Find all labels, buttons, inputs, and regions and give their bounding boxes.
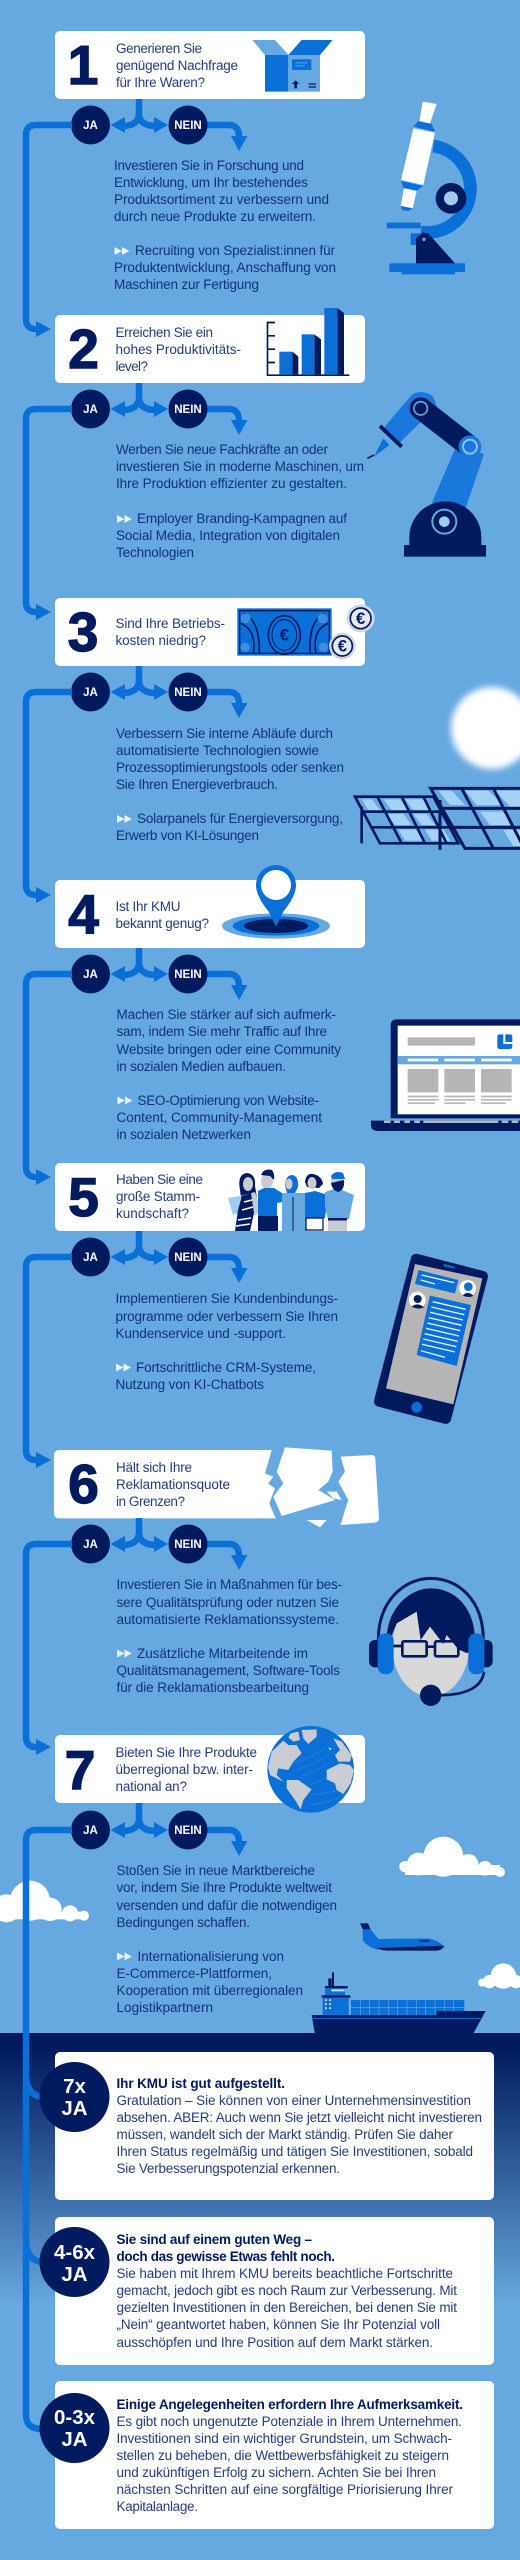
tip text: Social Media, Integration von digitalen — [116, 528, 340, 543]
result text: Ihren Status regelmäßig und tätigen Sie Investitionen, sobald — [116, 2144, 473, 2159]
decision branch: JA — [83, 1539, 98, 1551]
arrow: ja to step 6 — [26, 1257, 72, 1468]
arrow: ja to step 5 — [26, 974, 72, 1185]
recommendation text: programme oder verbessern Sie Ihren — [116, 1309, 338, 1324]
decision branch — [71, 1518, 248, 1570]
recommendation text: sam, indem Sie mehr Traffic auf Ihre — [116, 1024, 327, 1039]
result text: und zukünftigen Erfolg zu sichern. Achten Sie bei Ihren — [116, 2465, 436, 2480]
icon: cloud left — [0, 1881, 89, 1922]
result text: Kapitalanlage. — [116, 2499, 198, 2514]
question: große Stamm- — [116, 1189, 200, 1204]
icon: group of customers — [228, 1170, 354, 1231]
icon: container ship — [312, 1972, 486, 2035]
recommendation text: sere Qualitätsprüfung oder nutzen Sie — [116, 1595, 339, 1610]
recommendation text: Entwicklung, um Ihr bestehendes — [114, 175, 308, 190]
result text: nächsten Schritten auf eine sorgfältige Priorisierung Ihrer — [116, 2482, 454, 2497]
recommendation text: investieren Sie in moderne Maschinen, um — [116, 459, 364, 474]
result text — [116, 2076, 482, 2176]
number 2: 2 — [68, 318, 99, 380]
decision branch: JA — [83, 687, 98, 699]
card — [55, 2381, 494, 2529]
tip text: Logistikpartnern — [116, 2000, 213, 2015]
tip text: in sozialen Netzwerken — [116, 1127, 251, 1142]
recommendation text: Ihre Produktion effizienter zu gestalten. — [116, 476, 347, 491]
decision branch: NEIN — [174, 120, 202, 132]
number 6: 6 — [68, 1453, 99, 1515]
decision branch: JA — [83, 969, 98, 981]
recommendation text: Bedingungen schaffen. — [116, 1915, 250, 1930]
icon: smartphone chat — [373, 1253, 489, 1425]
question — [116, 1460, 230, 1509]
icon: airplane — [360, 1923, 444, 1951]
result text: gezielten Investitionen in den Bereichen, bei denen Sie mit — [116, 2300, 457, 2315]
result text — [116, 2397, 463, 2514]
recommendation text: Machen Sie stärker auf sich aufmerk- — [116, 1007, 336, 1022]
decision branch: NEIN — [174, 1825, 202, 1837]
question: Hält sich Ihre — [116, 1460, 192, 1475]
icon: bar chart — [267, 308, 349, 376]
tip text: Erwerb von KI-Lösungen — [116, 828, 259, 843]
recommendation text: Stoßen Sie in neue Marktbereiche — [116, 1863, 315, 1878]
tip text: Employer Branding-Kampagnen auf — [137, 511, 347, 526]
result text: Sie haben mit Ihrem KMU bereits beachtliche Fortschritte — [116, 2266, 453, 2281]
number 1: 1 — [68, 34, 98, 96]
panel: step 7 — [55, 1726, 365, 2015]
recommendation text: vor, indem Sie Ihre Produkte weltweit — [116, 1880, 332, 1895]
card — [55, 1163, 365, 1231]
icon: cardboard box — [252, 40, 333, 92]
question: Haben Sie eine — [116, 1172, 203, 1187]
decision branch: NEIN — [174, 969, 202, 981]
recommendation text: Werben Sie neue Fachkräfte an oder — [116, 442, 328, 457]
panel: result 4-6x ja — [40, 2217, 494, 2365]
recommendation text: Produktsortiment zu verbessern und — [114, 192, 329, 207]
decision branch — [71, 1231, 248, 1283]
result text: Sie sind auf einem guten Weg – — [116, 2232, 312, 2247]
recommendation text: Investieren Sie in Maßnahmen für bes- — [116, 1577, 342, 1592]
question: genügend Nachfrage — [116, 58, 238, 73]
card — [55, 315, 365, 383]
tip text — [116, 811, 343, 843]
number 3: 3 — [68, 601, 98, 663]
arrow: ja to step 2 — [26, 125, 72, 337]
tip text — [114, 243, 336, 292]
question: Generieren Sie — [116, 41, 202, 56]
decision branch: JA — [83, 120, 98, 132]
panel: result 0-3x ja — [40, 2381, 494, 2529]
result text: stellen zu beheben, die Wettbewerbsfähigkeit zu steigern — [116, 2448, 449, 2463]
tip text: Kooperation mit überregionalen — [116, 1983, 303, 1998]
question: in Grenzen? — [116, 1494, 185, 1509]
tip text: Recruiting von Spezialist:innen für — [135, 243, 336, 258]
tip text — [116, 1949, 303, 2015]
icon: banknote with coins: € — [356, 609, 365, 628]
decision branch: NEIN — [174, 404, 202, 416]
icon: cloud small — [478, 1963, 520, 1989]
recommendation text: Sie Ihren Energieverbrauch. — [116, 777, 278, 792]
panel: step 2 — [26, 308, 486, 620]
tip text: für die Reklamationsbearbeitung — [116, 1680, 309, 1695]
result text: gemacht, jedoch gibt es noch Raum zur Verbesserung. Mit — [116, 2283, 457, 2298]
recommendation text — [116, 1007, 341, 1074]
question — [116, 899, 209, 931]
tip text: Maschinen zur Fertigung — [114, 277, 259, 292]
question: national an? — [116, 1779, 187, 1794]
result text: absehen. ABER: Auch wenn Sie jetzt vielleicht nicht investieren — [116, 2110, 482, 2125]
badge: JA — [61, 2263, 88, 2286]
badge — [40, 2062, 110, 2132]
arrow: ja to step 7 — [26, 1544, 72, 1755]
decision branch: NEIN — [174, 1252, 202, 1264]
badge — [40, 2393, 110, 2463]
decision branch — [71, 383, 248, 435]
icon: microscope — [387, 102, 470, 274]
question: überregional bzw. inter- — [116, 1762, 253, 1777]
badge: 0-3x — [54, 2406, 96, 2429]
icon: laptop — [371, 1019, 520, 1131]
card — [55, 2052, 494, 2200]
tip text — [116, 1093, 322, 1142]
card — [55, 1735, 365, 1803]
tip text — [116, 1360, 316, 1392]
question: Erreichen Sie ein — [116, 325, 213, 340]
panel: step 6 — [26, 1447, 493, 1755]
decision branch: JA — [83, 1252, 98, 1264]
tip text: Solarpanels für Energieversorgung, — [137, 811, 343, 826]
decision branch — [71, 666, 248, 718]
arrow: ja to step 4 — [26, 692, 72, 903]
question: kosten niedrig? — [116, 633, 206, 648]
badge: 7x — [63, 2075, 86, 2098]
tip text: SEO-Optimierung von Website- — [138, 1093, 319, 1108]
tip text: Fortschrittliche CRM-Systeme, — [136, 1360, 316, 1375]
tip text: Zusätzliche Mitarbeitende im — [137, 1646, 308, 1661]
panel: result 7x ja — [40, 2052, 494, 2200]
result text: Ihr KMU ist gut aufgestellt. — [116, 2076, 285, 2091]
tip text: Content, Community-Management — [116, 1110, 322, 1125]
question: für Ihre Waren? — [116, 75, 205, 90]
recommendation text: Website bringen oder eine Community — [116, 1042, 341, 1057]
icon: support agent with headset — [369, 1578, 493, 1706]
icon: cloud right — [399, 1837, 505, 1877]
badge — [40, 2227, 110, 2297]
tip text: Nutzung von KI-Chatbots — [116, 1377, 264, 1392]
number 7: 7 — [65, 1739, 95, 1801]
icon: banknote with coins: € — [280, 626, 289, 645]
recommendation text — [116, 1577, 342, 1627]
icon: sun — [451, 687, 520, 769]
decision branch: NEIN — [174, 687, 202, 699]
torn card — [54, 1447, 379, 1527]
card — [55, 880, 365, 948]
decision branch: NEIN — [174, 1539, 202, 1551]
icon: solar panels — [355, 788, 520, 850]
icon: map pin — [222, 865, 330, 939]
result text: Investitionen sind ein wichtiger Grundstein, um Schwach- — [116, 2431, 452, 2446]
question — [116, 41, 238, 90]
icon: globe — [267, 1726, 354, 1813]
result text — [116, 2232, 457, 2350]
icon: banknote with coins — [237, 604, 375, 659]
icon: robot arm — [367, 392, 486, 557]
recommendation text — [116, 726, 344, 792]
card — [55, 2217, 494, 2365]
recommendation text: versenden und dafür die notwendigen — [116, 1898, 337, 1913]
badge: 4-6x — [54, 2241, 96, 2264]
card — [55, 598, 365, 666]
tip text: E-Commerce-Plattformen, — [116, 1966, 272, 1981]
panel: step 5 — [26, 1163, 489, 1468]
badge: JA — [61, 2097, 88, 2120]
tip text — [116, 1646, 340, 1695]
question — [116, 616, 225, 648]
number 4: 4 — [68, 883, 99, 945]
decision branch — [71, 948, 248, 1000]
question: level? — [116, 359, 148, 374]
question — [116, 1172, 203, 1221]
question: Ist Ihr KMU — [116, 899, 180, 914]
recommendation text — [116, 1863, 337, 1930]
recommendation text — [114, 158, 329, 224]
recommendation text — [116, 1291, 338, 1341]
result text: Sie Verbesserungspotenzial erkennen. — [116, 2161, 340, 2176]
decision branch — [71, 1803, 248, 1856]
result text: Gratulation – Sie können von einer Unternehmensinvestition — [116, 2093, 471, 2108]
recommendation text: Verbessern Sie interne Abläufe durch — [116, 726, 333, 741]
recommendation text: Investieren Sie in Forschung und — [114, 158, 304, 173]
question: hohes Produktivitäts- — [116, 342, 241, 357]
result text: Einige Angelegenheiten erfordern Ihre Aufmerksamkeit. — [116, 2397, 463, 2412]
question — [116, 1745, 257, 1794]
question: Sind Ihre Betriebs- — [116, 616, 225, 631]
icon: banknote with coins: € — [338, 637, 347, 656]
recommendation text: Kundenservice und -support. — [116, 1326, 286, 1341]
recommendation text: Prozessoptimierungstools oder senken — [116, 760, 344, 775]
recommendation text: automatisierte Technologien sowie — [116, 743, 319, 758]
question: bekannt genug? — [116, 916, 209, 931]
arrow: ja line to results — [26, 1830, 72, 2429]
tip text — [116, 511, 347, 560]
result text: ausschöpfen und Ihre Position auf dem Markt stärken. — [116, 2335, 433, 2350]
result text: müssen, wandelt sich der Markt ständig. Prüfen Sie daher — [116, 2127, 454, 2142]
question: Bieten Sie Ihre Produkte — [116, 1745, 257, 1760]
decision branch: JA — [83, 1825, 98, 1837]
tip text: Internationalisierung von — [138, 1949, 284, 1964]
number 5: 5 — [68, 1166, 99, 1228]
recommendation text: durch neue Produkte zu erweitern. — [114, 209, 316, 224]
recommendation text: Implementieren Sie Kundenbindungs- — [116, 1291, 338, 1306]
panel: step 4 — [26, 865, 520, 1185]
badge: JA — [61, 2428, 88, 2451]
decision branch — [71, 99, 248, 151]
tip text: Qualitätsmanagement, Software-Tools — [116, 1663, 340, 1678]
result text: „Nein“ geantwortet haben, können Sie Ihr Potenzial voll — [116, 2317, 440, 2332]
question — [116, 325, 241, 374]
result text: Es gibt noch ungenutzte Potenziale in Ihrem Unternehmen. — [116, 2414, 462, 2429]
recommendation text: in sozialen Medien aufbauen. — [116, 1059, 286, 1074]
question: Reklamationsquote — [116, 1477, 230, 1492]
tip text: Technologien — [116, 545, 194, 560]
recommendation text — [116, 442, 364, 491]
ocean gradient — [0, 2033, 520, 2305]
question: kundschaft? — [116, 1206, 189, 1221]
panel: step 1 — [26, 31, 470, 337]
tip text: Produktentwicklung, Anschaffung von — [114, 260, 336, 275]
card — [55, 31, 365, 99]
panel: step 3 — [26, 598, 520, 903]
result text: doch das gewisse Etwas fehlt noch. — [116, 2249, 335, 2264]
decision branch: JA — [83, 404, 98, 416]
recommendation text: automatisierte Reklamationssysteme. — [116, 1612, 339, 1627]
arrow: ja to step 3 — [26, 409, 72, 620]
